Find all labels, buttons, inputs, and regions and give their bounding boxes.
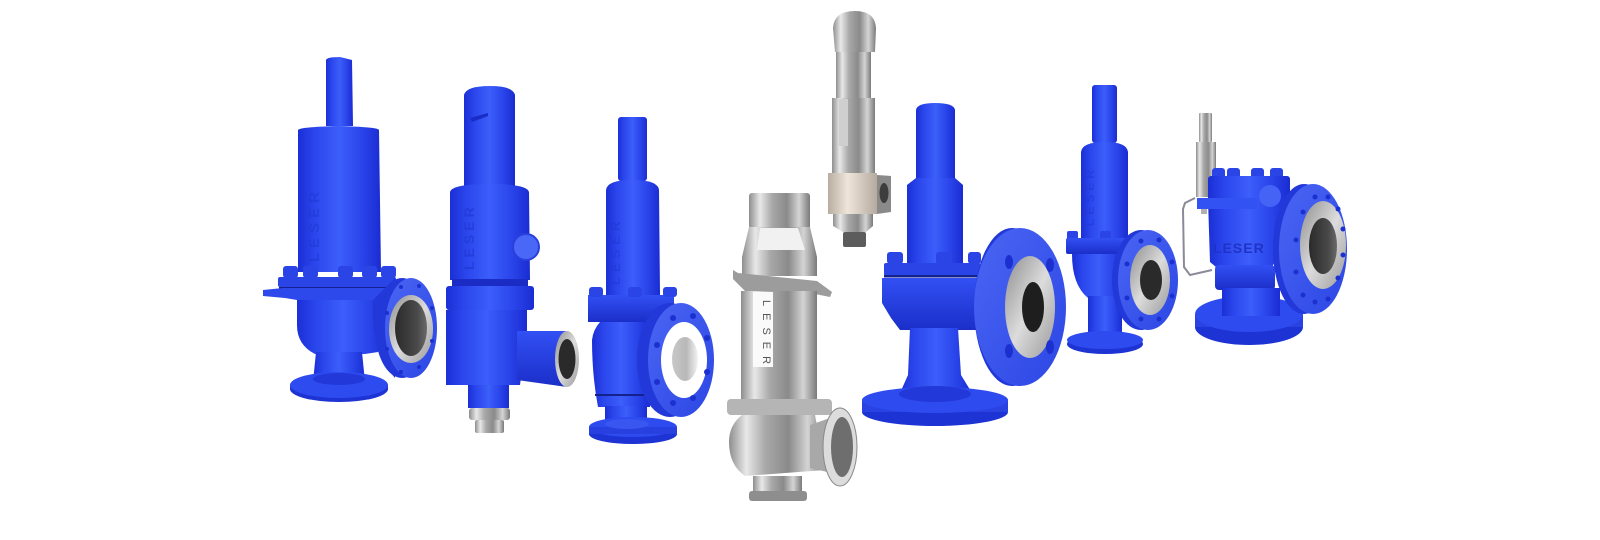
side flange (373, 278, 437, 378)
valve 5: sanitary stainless valve (727, 193, 857, 501)
logo plate (839, 99, 848, 146)
valve 8: blue valve with lifting device and stainless stem (1183, 113, 1347, 345)
dome (1259, 185, 1281, 207)
bonnet (606, 180, 660, 295)
logo: LESER (306, 187, 323, 262)
valve 3: blue PTFE-lined valve (588, 117, 714, 444)
side flange (1112, 230, 1178, 330)
top cap (749, 193, 810, 229)
cap (833, 11, 876, 52)
outlet (517, 331, 567, 387)
body (882, 278, 985, 330)
neck (1088, 296, 1122, 336)
lower body (1215, 265, 1275, 290)
main body (1208, 200, 1290, 272)
outlet end (555, 331, 579, 387)
base (753, 476, 802, 492)
neck (900, 328, 972, 393)
bolt holes (1294, 194, 1346, 304)
base flange (290, 372, 388, 402)
flange and bolts (884, 252, 981, 278)
side flange (1273, 184, 1347, 314)
base flange (862, 386, 1008, 426)
stem (326, 57, 353, 126)
neck (836, 52, 871, 98)
logo label: LESER (760, 300, 772, 371)
neck and base flange (1195, 288, 1303, 345)
bolt holes (385, 284, 434, 374)
logo: LESER (1083, 166, 1097, 226)
valve 6: large blue flanged valve (862, 103, 1066, 426)
plug (513, 234, 539, 260)
body (297, 300, 390, 354)
body (446, 310, 527, 385)
bolt holes (654, 313, 710, 406)
bonnet (907, 178, 963, 264)
bolt holes (1005, 255, 1054, 358)
barrel (741, 291, 817, 400)
stainless stem (1196, 113, 1216, 214)
ring (446, 286, 534, 310)
bonnet (450, 184, 530, 280)
bolts and flange (1066, 231, 1128, 254)
mounting wing (263, 288, 391, 302)
stem (464, 86, 515, 186)
logo: LESER (608, 217, 623, 285)
lower fitting (833, 214, 873, 247)
valve 2: blue threaded valve (446, 86, 579, 433)
valve 4: small stainless valve (828, 11, 891, 247)
base flange (589, 417, 677, 444)
lower clamp (727, 399, 832, 415)
neck (313, 352, 365, 382)
bolts (1212, 168, 1283, 180)
lower adjuster (468, 385, 509, 408)
base flange (1067, 331, 1143, 354)
side flange (637, 303, 714, 417)
drain tube (1183, 198, 1212, 275)
body (1072, 254, 1125, 298)
stem (618, 117, 647, 181)
arm (1197, 198, 1257, 209)
neck (605, 406, 647, 426)
valve 7: blue flanged valve, slim bonnet (1066, 85, 1178, 354)
logo: LESER (461, 203, 477, 270)
body (832, 98, 875, 173)
collar (452, 279, 528, 287)
valve 1: blue flanged valve with tall bonnet (263, 57, 437, 402)
silver cap (469, 408, 510, 433)
bonnet (298, 126, 381, 272)
block (828, 173, 891, 214)
ball body (729, 415, 825, 476)
logo: LESER (1213, 240, 1265, 256)
stem (916, 103, 955, 180)
body (592, 322, 650, 407)
flange and bolts (588, 287, 677, 322)
upper clamp (733, 270, 832, 297)
bonnet (1208, 176, 1290, 202)
side flange (974, 228, 1066, 386)
tri-clamp outlet (810, 408, 857, 486)
bolt holes (1124, 238, 1174, 322)
stem (1092, 85, 1117, 143)
logo label (753, 292, 773, 371)
bonnet (1081, 142, 1128, 238)
body flange with bolts (278, 266, 396, 288)
cone (742, 227, 817, 276)
